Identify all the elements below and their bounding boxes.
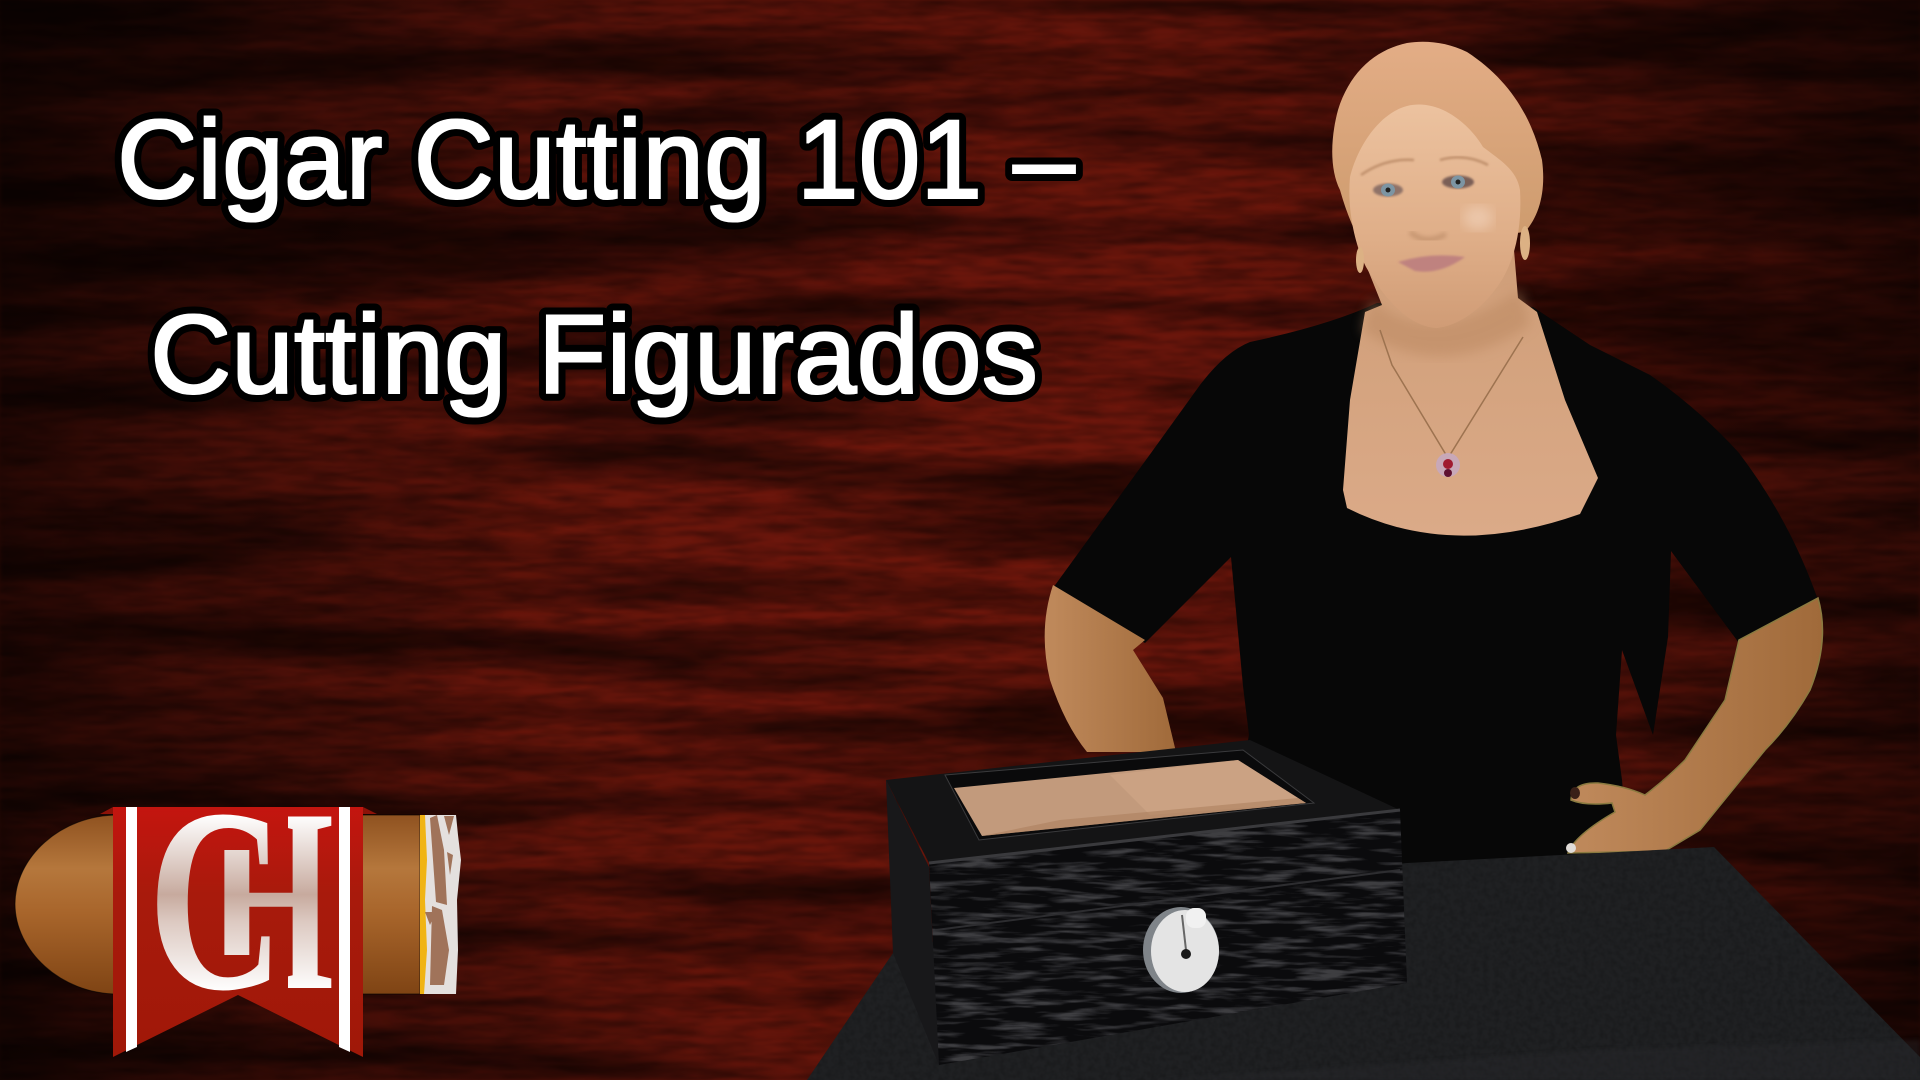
CH monogram: C [148,755,284,1045]
neck and chest [1343,250,1598,536]
logo: cigar with CH ribbon [14,807,461,1057]
hair [1332,42,1543,250]
cigar band and torn wrapper [420,815,461,994]
cheek highlight [1463,206,1493,230]
lid seam [936,870,1400,930]
left eye [1373,184,1403,196]
lips [1398,255,1465,272]
right eye [1442,176,1474,188]
ribbon [113,807,363,1057]
black cardigan and top [1053,303,1818,870]
presenter [1045,42,1822,870]
table [800,840,1920,1080]
fingernails [1566,787,1580,853]
humidor left side [886,780,939,1065]
humidor lid top [886,740,1400,863]
face [1349,105,1520,328]
wood grain [930,812,1407,1062]
nose shadow [1410,232,1446,240]
glass window [945,750,1314,840]
humidor interior [954,760,1306,836]
earrings [1356,226,1530,273]
CH monogram: H [208,755,334,1045]
table front edge [1150,1040,1920,1080]
necklace [1380,330,1523,458]
title line 1: Cigar Cutting 101 – [117,97,1076,222]
cigar body [15,815,420,994]
pendant [1436,453,1460,477]
neck shadow [1362,290,1530,356]
CH monogram [157,814,332,990]
eyebrows [1361,157,1488,175]
right arm and hand [1568,598,1822,853]
title [117,97,1076,417]
ribbon folds [100,807,377,814]
lid highlight edge [929,810,1400,863]
humidor [886,740,1420,1080]
humidor front face [929,810,1407,1065]
ribbon white stripes [126,807,350,1052]
hygrometer [1143,907,1219,993]
title line 2: Cutting Figurados [150,292,1038,417]
left arm [1045,585,1176,752]
